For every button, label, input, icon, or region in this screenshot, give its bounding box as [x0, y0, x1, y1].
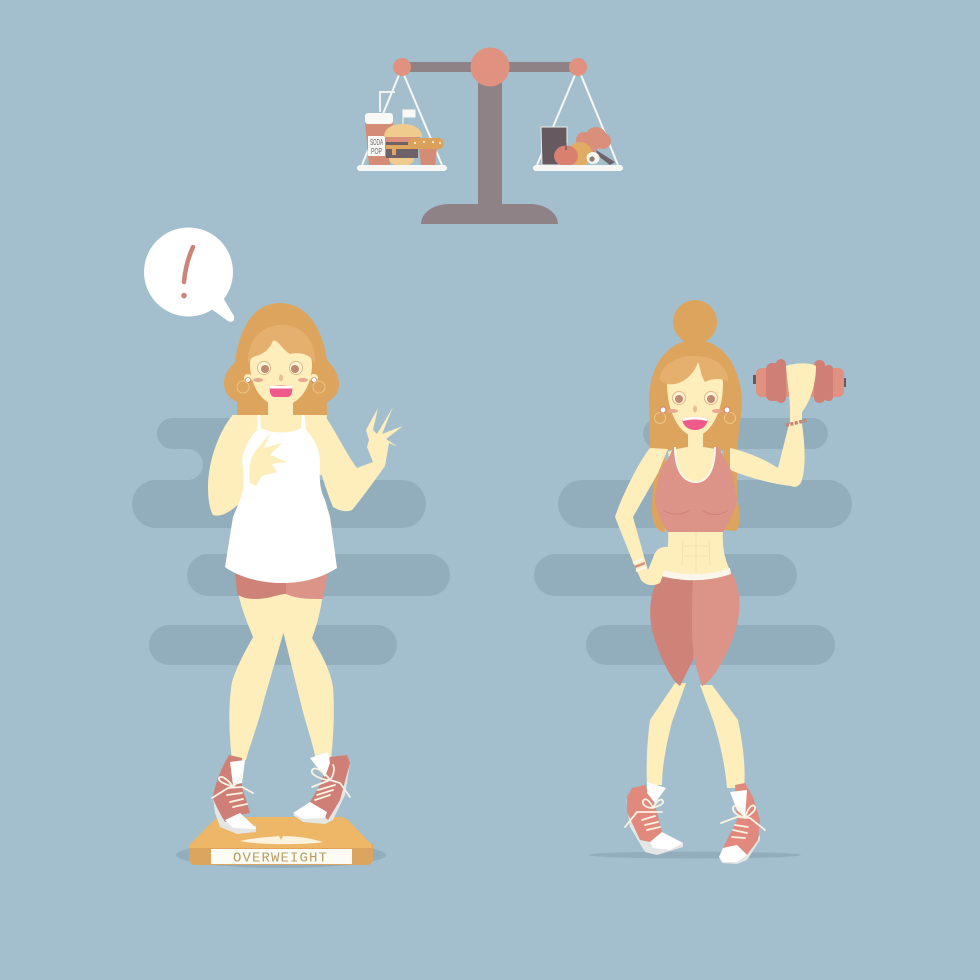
bathroom scale platform	[176, 817, 386, 868]
lower legs	[647, 683, 745, 788]
raised hand	[786, 363, 816, 424]
nose	[693, 406, 697, 412]
scale post and base	[421, 80, 558, 224]
left leg	[229, 592, 284, 760]
sock	[647, 782, 666, 803]
scale strings	[362, 75, 618, 165]
background stripes: left group	[132, 418, 450, 665]
juice glass	[541, 127, 567, 165]
orange	[568, 142, 592, 166]
torso	[662, 530, 730, 576]
exclamation mark	[184, 247, 193, 296]
healthy food on right pan	[541, 127, 615, 166]
upper	[213, 755, 250, 822]
platform sides	[189, 844, 373, 865]
long hair	[649, 340, 742, 532]
hot dog	[408, 138, 444, 149]
broccoli	[576, 127, 615, 165]
left arm	[208, 416, 252, 516]
left sneaker	[212, 755, 256, 834]
waistband	[661, 568, 731, 580]
nose	[279, 374, 283, 382]
laces	[625, 799, 663, 830]
laces	[212, 774, 253, 807]
neckline trim	[675, 447, 715, 482]
toe cap	[650, 832, 683, 850]
right eye	[704, 392, 718, 404]
burger flag	[403, 110, 415, 124]
left ear and earring	[237, 374, 252, 393]
sports bra	[655, 447, 737, 532]
sole	[213, 797, 256, 834]
sock	[310, 752, 330, 777]
sock	[230, 760, 245, 785]
right leg	[282, 592, 334, 760]
abdominal lines	[682, 532, 710, 572]
bracelet	[786, 420, 807, 425]
left eye	[258, 362, 270, 374]
laces	[312, 765, 350, 800]
left pan	[357, 165, 447, 171]
fries box	[419, 148, 437, 166]
white tank top	[225, 415, 337, 583]
right arm holding dumbbell	[730, 424, 805, 487]
laces	[721, 805, 765, 838]
leggings	[650, 570, 739, 686]
left sneaker	[625, 782, 683, 855]
open mouth	[270, 386, 292, 397]
neck and chest	[668, 425, 722, 492]
smile	[682, 417, 708, 430]
speech bubble with exclamation mark	[144, 228, 234, 322]
sock	[730, 790, 747, 818]
background stripes: right group	[534, 418, 852, 665]
overweight label: OVERWEIGHT	[233, 850, 328, 866]
right eye	[290, 362, 302, 374]
scale beam	[402, 62, 578, 72]
scale pivots	[393, 48, 587, 86]
burger	[384, 124, 422, 166]
right sneaker	[293, 752, 350, 824]
right pan	[533, 165, 623, 171]
scale shadow	[176, 842, 386, 868]
toe cap	[225, 813, 256, 829]
junk food on left pan	[365, 92, 444, 166]
toe cap	[719, 845, 747, 862]
sole	[626, 798, 683, 855]
right sneaker	[719, 783, 765, 864]
soda label: POP	[371, 147, 382, 156]
neck and chest	[232, 400, 327, 475]
right woman: fit	[615, 300, 846, 864]
floor shadow under right woman	[588, 852, 801, 858]
cheeks	[253, 378, 308, 382]
dial window	[240, 836, 323, 844]
shorts	[235, 572, 328, 599]
avocado	[586, 152, 600, 164]
upper	[310, 755, 350, 820]
face	[667, 360, 723, 436]
balance scale with food	[357, 48, 623, 224]
soda lid	[365, 113, 393, 124]
face	[250, 340, 312, 406]
upper	[627, 785, 662, 842]
cheeks	[668, 409, 722, 413]
toe cap	[293, 802, 327, 819]
upper	[723, 783, 760, 855]
hair bun	[673, 300, 717, 344]
overweight label	[211, 849, 352, 866]
right arm and hand	[305, 407, 403, 511]
left eye	[672, 392, 686, 404]
right ear and earring	[310, 374, 325, 393]
hand on chest	[249, 433, 287, 486]
fringe	[660, 356, 728, 384]
soda label: SODA	[370, 138, 383, 147]
fringe	[248, 325, 315, 363]
earrings	[654, 407, 736, 424]
sole	[719, 835, 760, 864]
hair back	[224, 303, 339, 415]
sole	[293, 763, 350, 824]
soda label	[368, 136, 385, 156]
soda cup	[365, 122, 393, 166]
dumbbell	[753, 359, 846, 403]
soda straw	[380, 92, 395, 112]
left arm and hand on hip	[615, 448, 669, 585]
left woman: overweight	[208, 303, 403, 834]
tomato	[554, 143, 578, 166]
bust lines	[663, 510, 728, 514]
platform top	[189, 817, 372, 848]
wristband	[633, 559, 646, 571]
